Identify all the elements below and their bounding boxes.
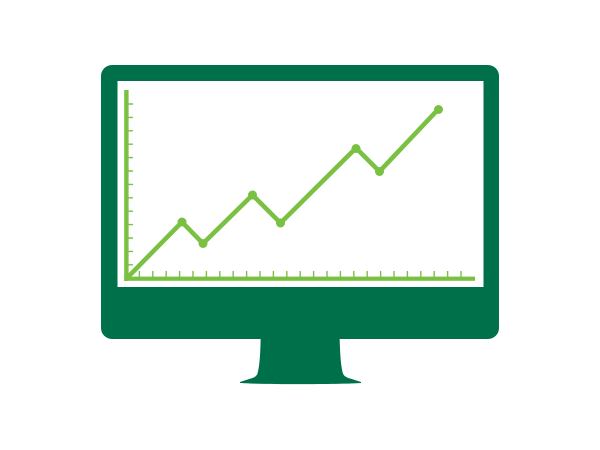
x axis [124, 271, 475, 281]
data points [178, 105, 443, 248]
monitor screen [118, 81, 484, 287]
monitor frame [101, 65, 499, 339]
data line [126, 110, 438, 279]
y axis [124, 90, 133, 281]
monitor stand [240, 337, 361, 384]
line chart [124, 90, 475, 281]
